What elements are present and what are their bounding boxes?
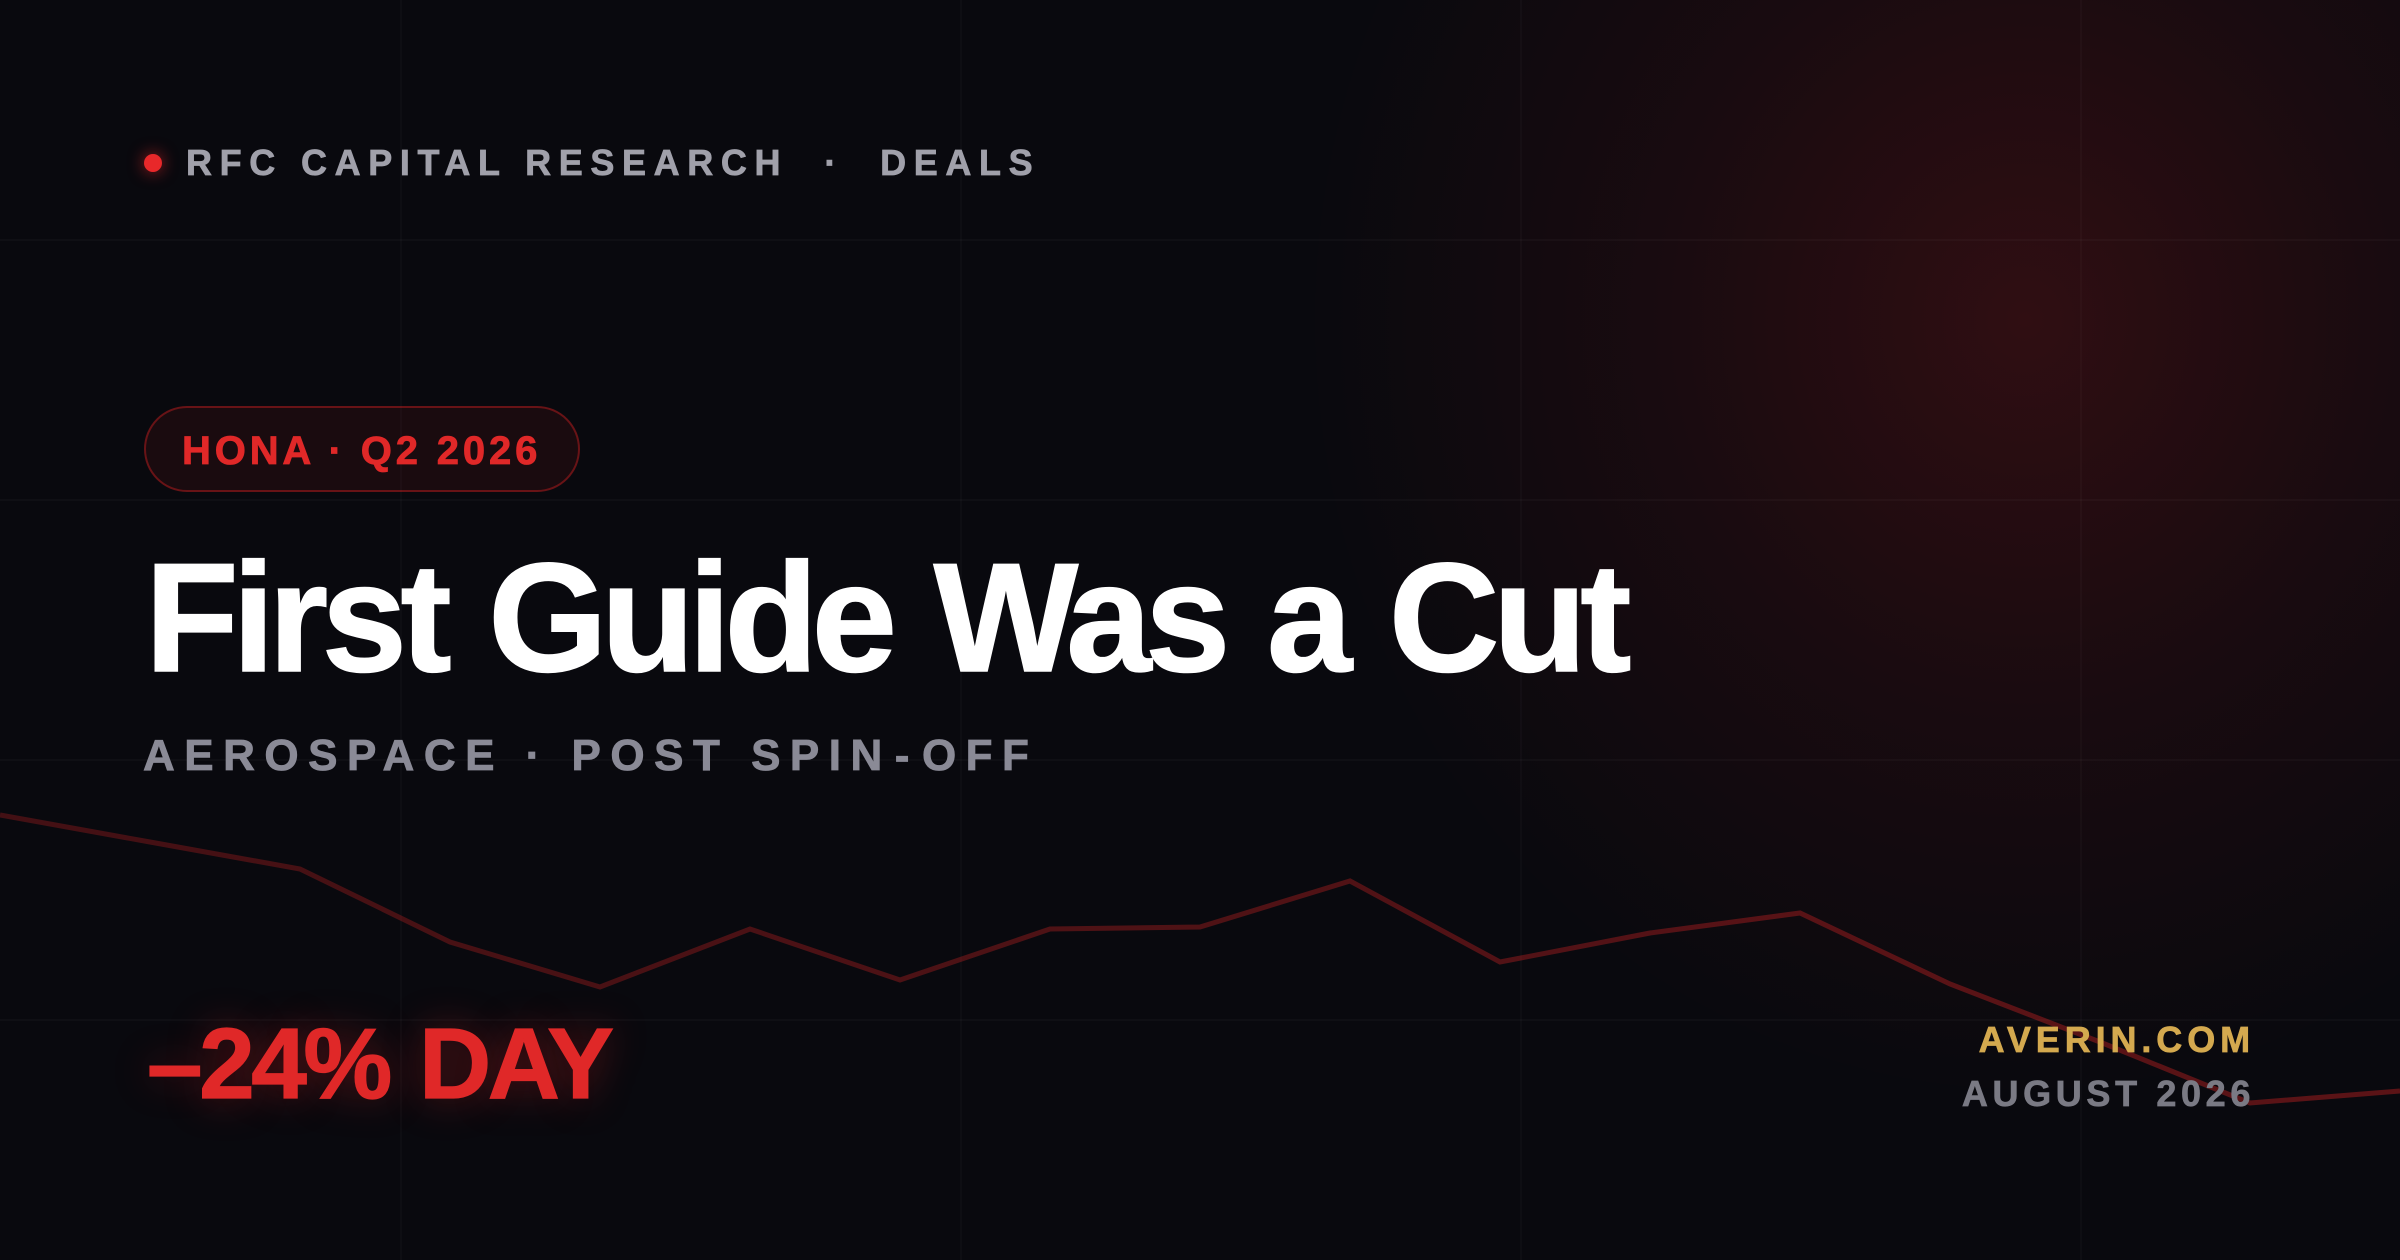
site name: AVERIN.COM (1979, 1019, 2255, 1060)
header: source and section label: RFC CAPITAL RESEARCH · DEALS (186, 142, 1040, 183)
pill: ticker and quarter (144, 406, 580, 492)
pill label: HONA · Q2 2026 (182, 429, 541, 473)
icon: red status dot (144, 154, 162, 172)
title: First Guide Was a Cut (145, 531, 1625, 704)
subtitle: AEROSPACE · POST SPIN-OFF (143, 731, 1038, 780)
callout: daily move: –24% DAY (147, 1008, 610, 1120)
date: AUGUST 2026 (1962, 1073, 2255, 1114)
